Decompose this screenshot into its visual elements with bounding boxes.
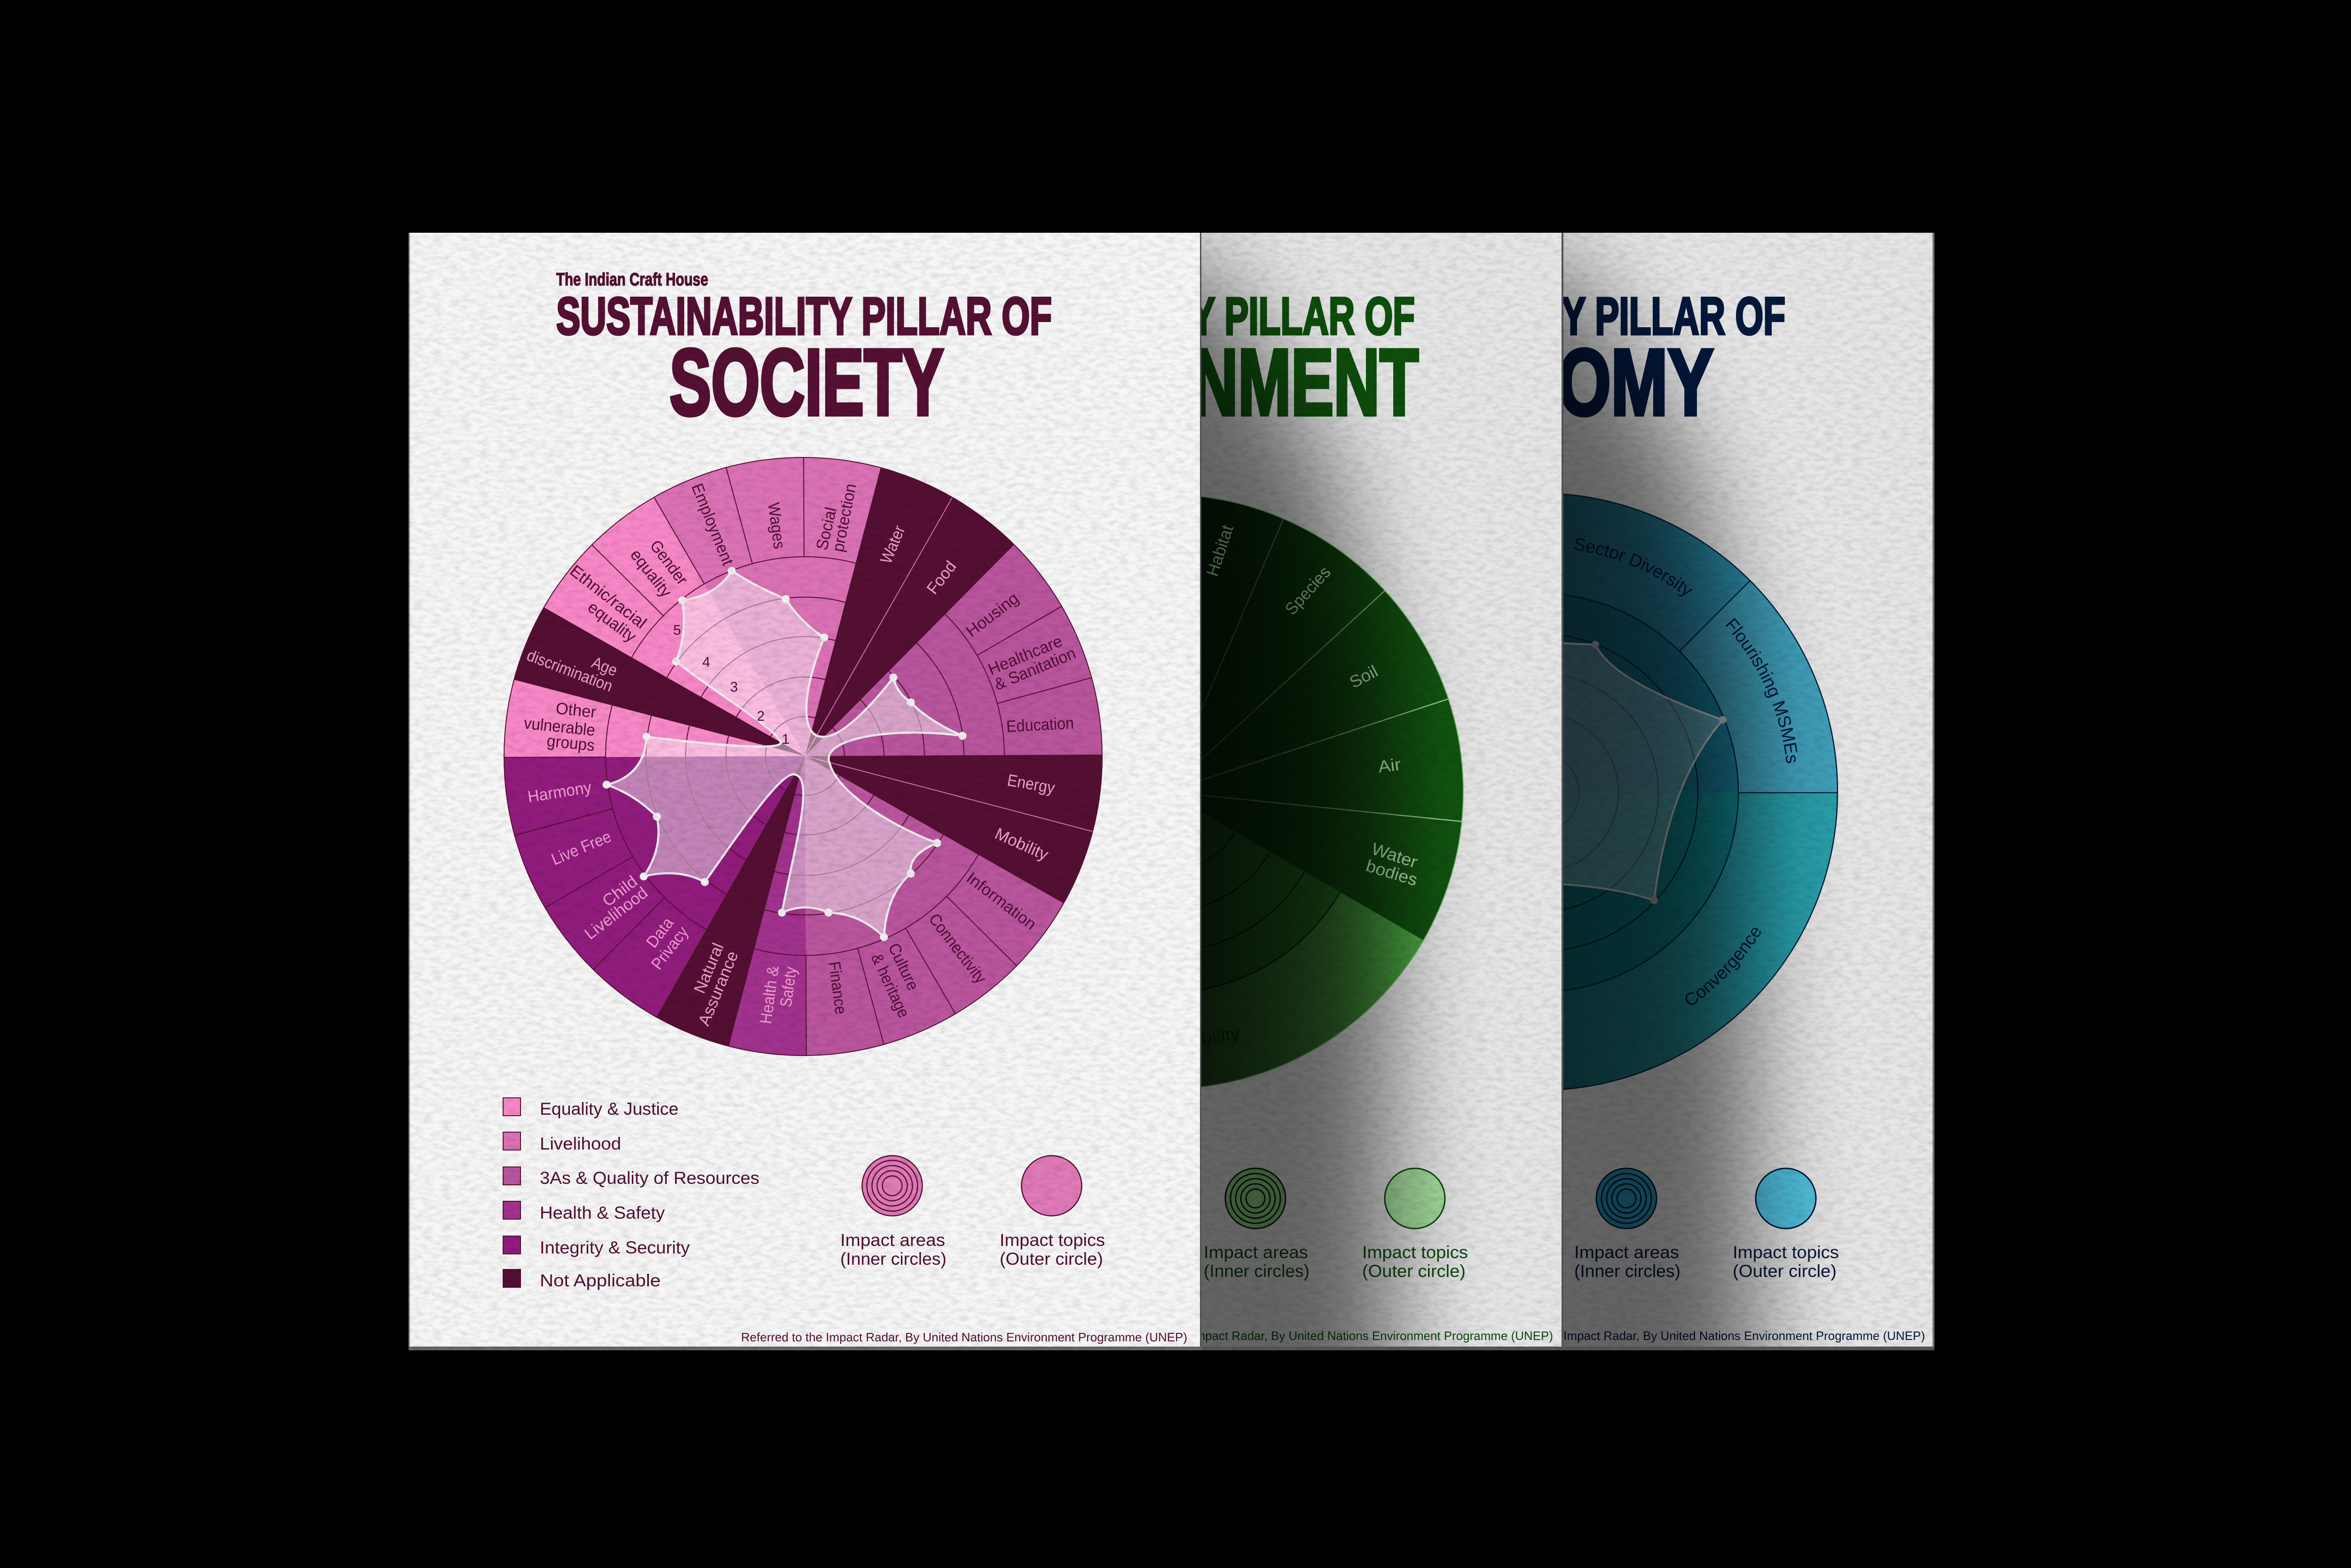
label: Social protection: [813, 482, 860, 553]
legend item: Livelihood: [503, 1132, 621, 1153]
panel: environment poster: [772, 233, 1563, 1458]
label: Soil: Soil: [1346, 661, 1381, 692]
label: Harmony: Harmony: [526, 778, 593, 806]
label: Air: Air: [1377, 755, 1402, 776]
label: Water bodies: Water: [1369, 839, 1420, 872]
legend: economy impact areas: (Inner circles): [1574, 1261, 1680, 1281]
legend: environment impact topics: Impact topics: [1362, 1243, 1468, 1262]
legend: society impact topics: (Outer circle): [1000, 1249, 1103, 1269]
label: Data Privacy: Privacy: [647, 923, 692, 973]
label: Health and Safety: [757, 965, 800, 1025]
label: Gender equality: [627, 537, 692, 601]
footnote: society source: Referred to the Impact Radar, By United Nations Environment Programme (UNEP): [741, 1330, 1187, 1344]
radar shape: [1505, 641, 1727, 904]
label: Ethnic/racial equality: equality: [584, 598, 640, 646]
label: partly hidden topic: bility: [1200, 1024, 1241, 1048]
legend: pillar categories: [503, 1098, 759, 1290]
sectors: livelihood: [615, 380, 900, 756]
label: Other vulnerable groups: Other: [555, 699, 597, 722]
sectors: not applicable: [441, 392, 1181, 1120]
radar scale numbers: 4: [702, 654, 710, 670]
label: Age discrimination: Age: [589, 653, 620, 680]
label: Natural Assurance: Assurance: [695, 948, 742, 1028]
label: Child Livelihood: Child: [599, 872, 641, 910]
label: Data Privacy: Data: [643, 914, 678, 951]
heading: economy: ECONOMY: [1360, 330, 1713, 435]
label: Live Free: Live Free: [549, 827, 614, 869]
label: Social protection: protection: [829, 482, 860, 553]
label: Connectivity: Connectivity: [925, 910, 990, 987]
footnote: environment source: Referred to the Impact Radar, By United Nations Environment Programme (UNEP): [1107, 1329, 1553, 1343]
label: Healthcare and Sanitation: & Sanitation: [992, 644, 1079, 694]
label: Other vulnerable groups: vulnerable: [523, 714, 596, 740]
heading: environment pillar line: SUSTAINABILITY PILLAR OF: [919, 287, 1415, 346]
label: Sector Diversity: Sector Diversity: [1572, 534, 1696, 601]
label: Water: Water: [877, 523, 909, 567]
legend item: Not Applicable: [503, 1269, 661, 1290]
footnote: economy source: Referred to the Impact Radar, By United Nations Environment Programme (UNEP): [1479, 1329, 1925, 1343]
legend: society impact topics: Impact topics: [1000, 1230, 1105, 1250]
legend: society impact areas: Impact areas: [840, 1230, 945, 1250]
label: Finance: Finance: [825, 961, 850, 1016]
label: Social protection: Social: [813, 505, 840, 552]
label: Employment: Employment: [688, 481, 737, 568]
label: Gender equality: Gender: [646, 537, 692, 589]
sectors: 3As and quality of resources: [805, 489, 1181, 1132]
label: Ethnic/racial equality: Ethnic/racial: [567, 561, 650, 632]
radar shape: [607, 571, 962, 937]
label: Wages: Wages: [764, 501, 789, 550]
radar scale numbers: 1: [782, 732, 789, 747]
label: Energy: Energy: [1006, 771, 1057, 797]
label: Water bodies: [1364, 839, 1420, 890]
label: Other vulnerable groups: [523, 699, 597, 755]
radar scale numbers: [673, 622, 789, 747]
legend: environment impact areas: [1204, 1168, 1310, 1281]
chart: environment radar wheel: [865, 489, 1492, 1168]
label: Child Livelihood: Livelihood: [581, 883, 651, 943]
label: Mobility: Mobility: [992, 824, 1051, 864]
label: Convergence: Convergence: [1680, 922, 1766, 1011]
label: Species: Species: [1281, 562, 1334, 619]
legend: environment impact topics: (Outer circle): [1362, 1261, 1466, 1281]
legend item: Livelihood: Livelihood: [540, 1134, 621, 1153]
label: Natural Assurance: Natural: [690, 940, 727, 996]
legend: society impact topics: [1000, 1156, 1105, 1269]
radar scale numbers: 3: [730, 679, 738, 695]
heading: society: SOCIETY: [670, 330, 944, 435]
legend: economy impact topics: Impact topics: [1733, 1243, 1839, 1262]
panel: society poster: [409, 233, 1201, 1350]
label: Culture and heritage: Culture: [884, 940, 922, 993]
legend: economy impact topics: [1733, 1168, 1839, 1281]
label: Housing: Housing: [962, 589, 1022, 641]
legend item: Equality and Justice: Equality & Justice: [540, 1099, 678, 1119]
legend: environment impact areas: (Inner circles): [1204, 1261, 1310, 1281]
sector: health and safety: [710, 756, 807, 1132]
label: Gender equality: equality: [627, 546, 675, 601]
legend item: Integrity and Security: Integrity & Security: [540, 1238, 690, 1257]
legend: environment impact areas: Impact areas: [1204, 1243, 1308, 1262]
paper grain: [409, 233, 1934, 1350]
chart: society radar wheel: [429, 380, 1181, 1132]
label: Water bodies: bodies: [1364, 856, 1420, 890]
legend: economy impact areas: [1574, 1168, 1680, 1281]
legend item: Health and Safety: [503, 1201, 665, 1222]
legend: environment impact topics: [1362, 1168, 1468, 1281]
radar points: [603, 567, 967, 941]
legend item: 3As and Quality of Resources: 3As & Quality of Resources: [540, 1168, 759, 1188]
label: Culture and heritage: & heritage: [868, 951, 913, 1021]
legend: society impact areas: [840, 1156, 947, 1269]
brand name: The Indian Craft House: [556, 270, 708, 290]
label: Other vulnerable groups: groups: [546, 732, 596, 755]
legend: economy impact areas: Impact areas: [1574, 1243, 1679, 1262]
label: Health and Safety: Safety: [777, 966, 800, 1008]
label: Education: Education: [1006, 714, 1074, 736]
label: Health and Safety: Health &: [757, 965, 782, 1025]
chart: economy radar wheel: [1563, 494, 1838, 1090]
heading: sustainability pillar line: SUSTAINABILITY PILLAR OF: [556, 287, 1052, 346]
label: Information: Information: [963, 869, 1040, 934]
heading: environment: ENVIRONMENT: [947, 330, 1419, 435]
legend item: Health and Safety: Health & Safety: [540, 1203, 665, 1222]
legend: economy impact topics: (Outer circle): [1733, 1261, 1837, 1281]
radar scale numbers: 5: [673, 622, 681, 638]
radar scale numbers: 2: [757, 709, 765, 724]
label: Food: Food: [923, 558, 960, 598]
label: Healthcare and Sanitation: Healthcare: [986, 632, 1065, 679]
label: Age discrimination: discrimination: [524, 646, 615, 695]
label: Habitat: Habitat: [1202, 522, 1237, 579]
legend item: Not Applicable: Not Applicable: [540, 1271, 661, 1290]
sectors: equality and justice: [429, 431, 805, 758]
legend: society impact areas: (Inner circles): [840, 1249, 947, 1269]
panel: economy poster: [1563, 233, 1934, 1350]
label: Flourishing MSMEs: Flourishing MSMEs: [1721, 615, 1802, 764]
heading: economy pillar line: SUSTAINABILITY PILLAR OF: [1290, 287, 1785, 346]
sectors: integrity and security: [429, 756, 805, 1083]
